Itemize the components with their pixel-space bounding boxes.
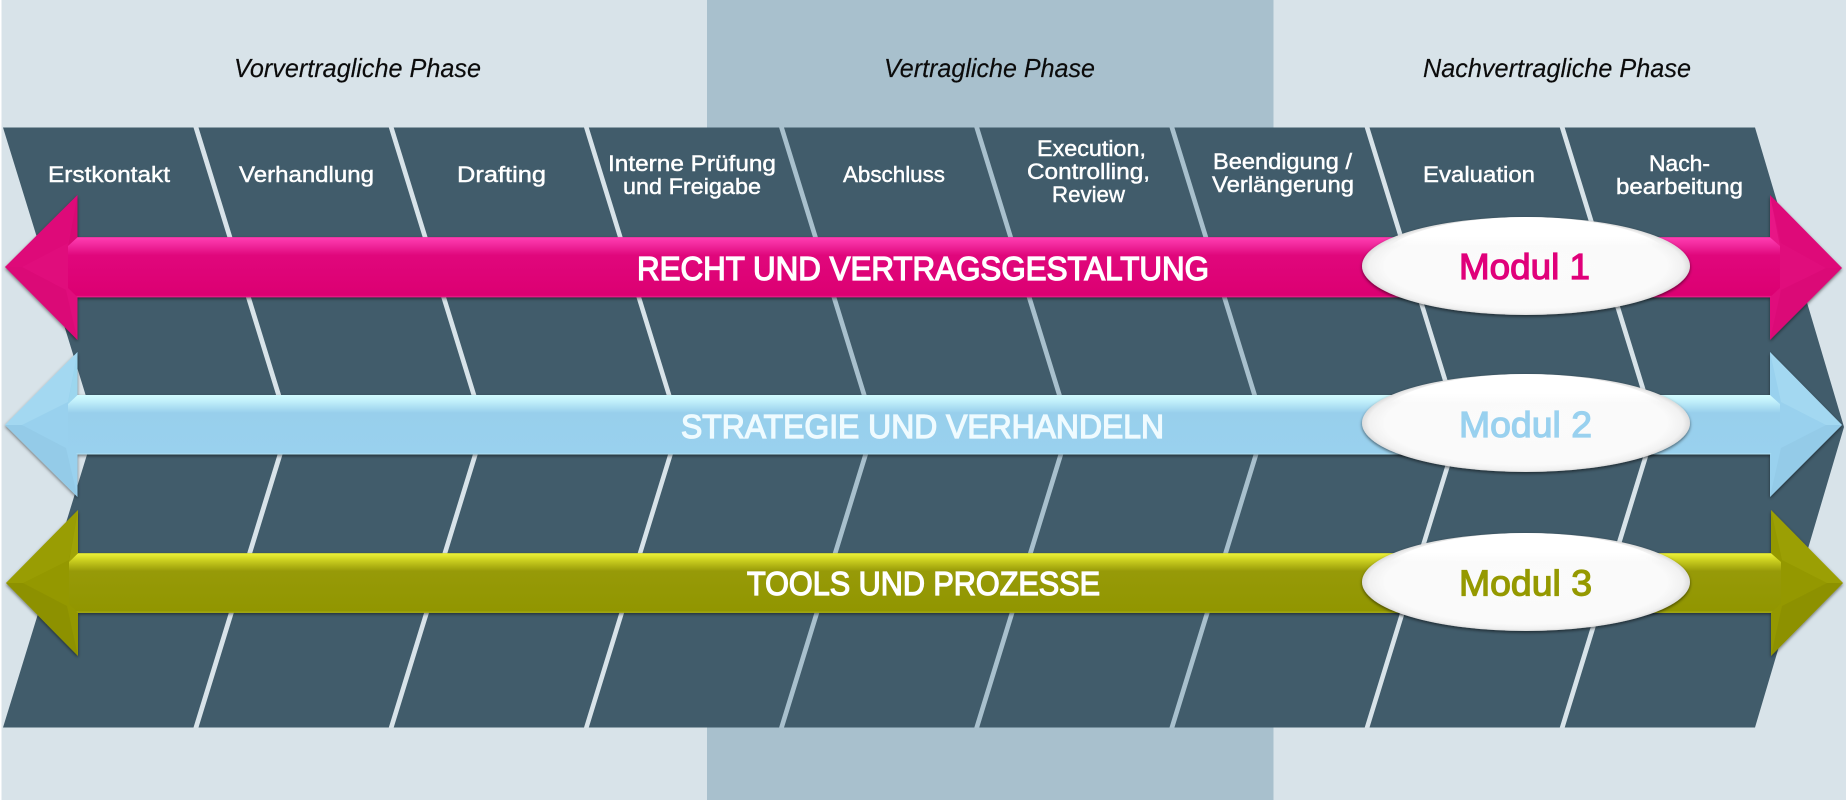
label: Execution, Controlling, Review: Execution, <box>1037 136 1146 161</box>
chevron: Execution, Controlling, Review <box>979 128 1262 728</box>
chevron: Interne Prüfung und Freigabe <box>589 128 872 728</box>
arrow: Tools und Prozesse <box>6 510 1843 656</box>
label: Interne Prüfung und Freigabe: und Freigabe <box>623 174 761 199</box>
chevron: Verhandlung <box>198 128 481 728</box>
label: Nachbearbeitung: bearbeitung <box>1616 174 1743 199</box>
callout: Modul 1 <box>1362 217 1690 315</box>
text: RECHT UND VERTRAGSGESTALTUNG: RECHT UND VERTRAGSGESTALTUNG <box>637 250 1209 287</box>
label: Execution, Controlling, Review: Controlling, <box>1027 159 1150 184</box>
text block: process step labels <box>48 136 1743 207</box>
label: Abschluss: Abschluss <box>843 162 945 187</box>
text: STRATEGIE UND VERHANDELN: STRATEGIE UND VERHANDELN <box>681 408 1164 445</box>
callout: Modul 3 <box>1362 533 1690 631</box>
chevron: Nachbearbeitung <box>1565 128 1844 728</box>
label: Interne Prüfung und Freigabe: Interne Prüfung <box>608 151 776 176</box>
callout: Modul 2 <box>1362 374 1690 472</box>
label: Verhandlung: Verhandlung <box>239 162 374 187</box>
label: Beendigung / Verlängerung: Beendigung / <box>1213 149 1353 174</box>
chevron: Abschluss <box>784 128 1067 728</box>
callout: Modul 3: Modul 3 <box>1459 562 1592 604</box>
label: Erstkontakt: Erstkontakt <box>48 162 170 187</box>
chevron: Evaluation <box>1370 128 1652 728</box>
label: Drafting: Drafting <box>457 162 546 187</box>
arrow: Strategie und Verhandeln <box>5 352 1842 497</box>
label: Nachbearbeitung: Nach- <box>1649 151 1710 176</box>
heading: Nachvertragliche Phase: Nachvertragliche Phase <box>1423 53 1691 83</box>
heading: Vorvertragliche Phase: Vorvertragliche Phase <box>234 53 481 83</box>
label: Execution, Controlling, Review: Review <box>1052 182 1125 207</box>
text: TOOLS UND PROZESSE: TOOLS UND PROZESSE <box>747 565 1100 602</box>
label: Beendigung / Verlängerung: Verlängerung <box>1212 172 1354 197</box>
callout: Modul 2: Modul 2 <box>1459 404 1592 445</box>
heading: phases <box>234 53 1691 83</box>
chevron: Beendigung / Verlängerung <box>1174 128 1457 728</box>
label: Evaluation: Evaluation <box>1423 162 1535 187</box>
panel: process chevrons <box>3 128 1844 728</box>
heading: Vertragliche Phase: Vertragliche Phase <box>884 53 1095 83</box>
chevron: Erstkontakt <box>3 128 286 728</box>
arrow: Recht und Vertragsgestaltung <box>5 195 1842 340</box>
callout: Modul 1: Modul 1 <box>1459 246 1590 287</box>
chevron: Drafting <box>394 128 676 728</box>
